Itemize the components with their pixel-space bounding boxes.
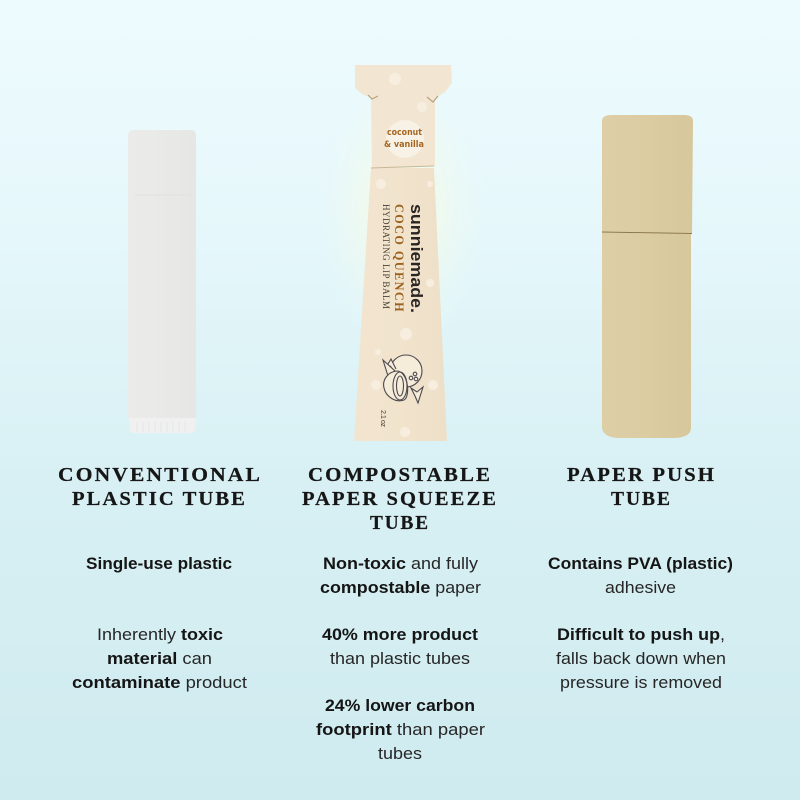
point: lower carbon: 24% lower carbon [325, 696, 475, 715]
point: toxic material: contaminate product [72, 673, 247, 692]
product: paper push tube [602, 115, 693, 438]
column 1: conventional plastic tube [58, 464, 262, 692]
heading: PLASTIC TUBE [72, 488, 247, 510]
point: non-toxic [320, 554, 481, 597]
point: PVA [548, 554, 733, 597]
cap label circle [386, 120, 424, 158]
heading: TUBE [611, 488, 672, 510]
cap text: flavour: coconut [387, 128, 422, 138]
heading [567, 464, 716, 510]
product: conventional plastic tube [128, 130, 196, 433]
point: difficult to push: Difficult to push up , [557, 625, 725, 644]
heading [58, 464, 262, 510]
brand name: sunniemade. [407, 204, 426, 313]
point: single-use: Single-use plastic [86, 554, 232, 573]
point: difficult to push [556, 625, 726, 692]
heading: PAPER SQUEEZE [302, 488, 498, 510]
point: lower carbon: footprint than paper [316, 720, 485, 739]
column 3: paper push tube [548, 464, 733, 692]
cap text: flavour [384, 128, 424, 150]
point: non-toxic: Non-toxic and fully [323, 554, 479, 573]
heading [302, 464, 498, 534]
heading: TUBE [370, 512, 430, 534]
point: toxic material: Inherently toxic [97, 625, 223, 644]
product name: COCO QUENCH [392, 204, 406, 313]
tube cap and flap [355, 65, 452, 169]
product descriptor: HYDRATING LIP BALM [381, 204, 391, 309]
point: PVA: adhesive [605, 578, 676, 597]
point: PVA: Contains PVA (plastic) [548, 554, 733, 573]
point: difficult to push: falls back down when [556, 649, 726, 668]
product: compostable paper squeeze tube [354, 65, 452, 441]
point: difficult to push: pressure is removed [560, 673, 722, 692]
glow behind centre tube [317, 70, 487, 350]
icon: coconut [383, 355, 423, 403]
net weight: 2.1 oz [379, 410, 386, 428]
point: lower carbon [316, 696, 485, 763]
column 2: compostable paper squeeze tube [302, 464, 498, 763]
point: non-toxic: compostable paper [320, 578, 481, 597]
tube body [354, 168, 447, 441]
heading: PAPER PUSH [567, 464, 716, 486]
point: toxic material [72, 625, 247, 692]
heading: CONVENTIONAL [58, 464, 262, 486]
point: more product [322, 625, 478, 668]
point: toxic material: material can [107, 649, 212, 668]
point: lower carbon: tubes [378, 744, 422, 763]
point: more product: than plastic tubes [330, 649, 470, 668]
heading: COMPOSTABLE [308, 464, 492, 486]
polka dots [371, 73, 438, 437]
point: more product: 40% more product [322, 625, 478, 644]
cap text: flavour: & vanilla [384, 140, 424, 150]
